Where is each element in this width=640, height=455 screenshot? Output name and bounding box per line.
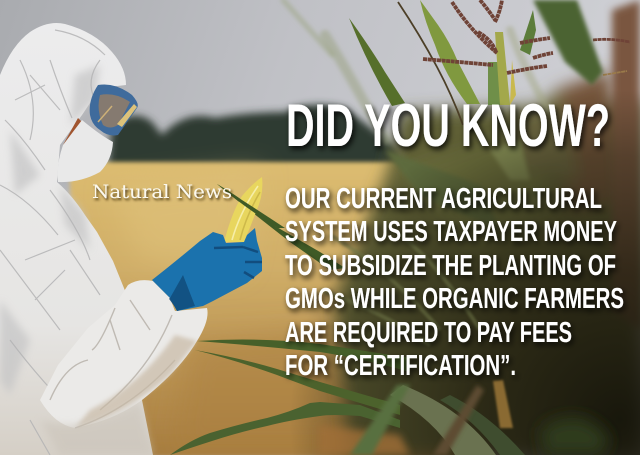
- leaf: broad front: [390, 385, 496, 455]
- blurred green foliage bottom right: [540, 417, 610, 455]
- corn kernels: [232, 186, 260, 240]
- face skin: [63, 118, 88, 145]
- leaf texture behind body text: [320, 235, 480, 345]
- background blades: [283, 0, 548, 140]
- glove fingers shading: [170, 247, 262, 309]
- corn stalk detail: [493, 380, 513, 428]
- body text block: [285, 183, 624, 382]
- safety goggles: [90, 84, 138, 135]
- watermark: Natural News: Natural News: [92, 181, 232, 203]
- golden wheat field: [70, 162, 460, 455]
- tassels: [423, 0, 630, 75]
- dark thin stem: [398, 2, 463, 125]
- face mask: [58, 120, 113, 182]
- thin leaf over corn: [217, 184, 285, 228]
- leaf: bottom sweep: [170, 402, 400, 455]
- field shading: [110, 170, 360, 455]
- blurred tree line: [108, 105, 400, 175]
- corn cob: [224, 177, 262, 242]
- leaf across corn: [217, 184, 345, 270]
- torso shadow: [40, 402, 153, 455]
- suit shading blobs: [0, 65, 100, 395]
- blue glove: [152, 228, 262, 311]
- large foreground blurred leaf: [533, 0, 603, 85]
- leaf: upper horizontal: [197, 340, 410, 372]
- lower leaves behind text: [385, 140, 530, 230]
- suit wrinkles: [0, 30, 105, 455]
- sleeve warm shadow: [75, 335, 197, 428]
- person in protective suit: [0, 23, 262, 455]
- suit body: [0, 23, 153, 455]
- sharp leaf centre: [420, 0, 480, 104]
- sleeve folds: [50, 300, 175, 428]
- body text block: FOR “CERTIFICATION”.: [285, 350, 516, 382]
- blurred brown stalk at the far right: [612, 0, 640, 330]
- blurred plant mass on the right: [283, 0, 640, 455]
- leaf: second horizontal: [195, 350, 400, 415]
- soft darkening over plants: [260, 60, 640, 455]
- lower leaves: [170, 340, 610, 455]
- corn stalks: [488, 62, 505, 105]
- orange ground patch: [318, 425, 410, 455]
- sharp leaf left: [349, 18, 405, 106]
- sleeve: [40, 280, 208, 428]
- glove shadow: [170, 275, 195, 311]
